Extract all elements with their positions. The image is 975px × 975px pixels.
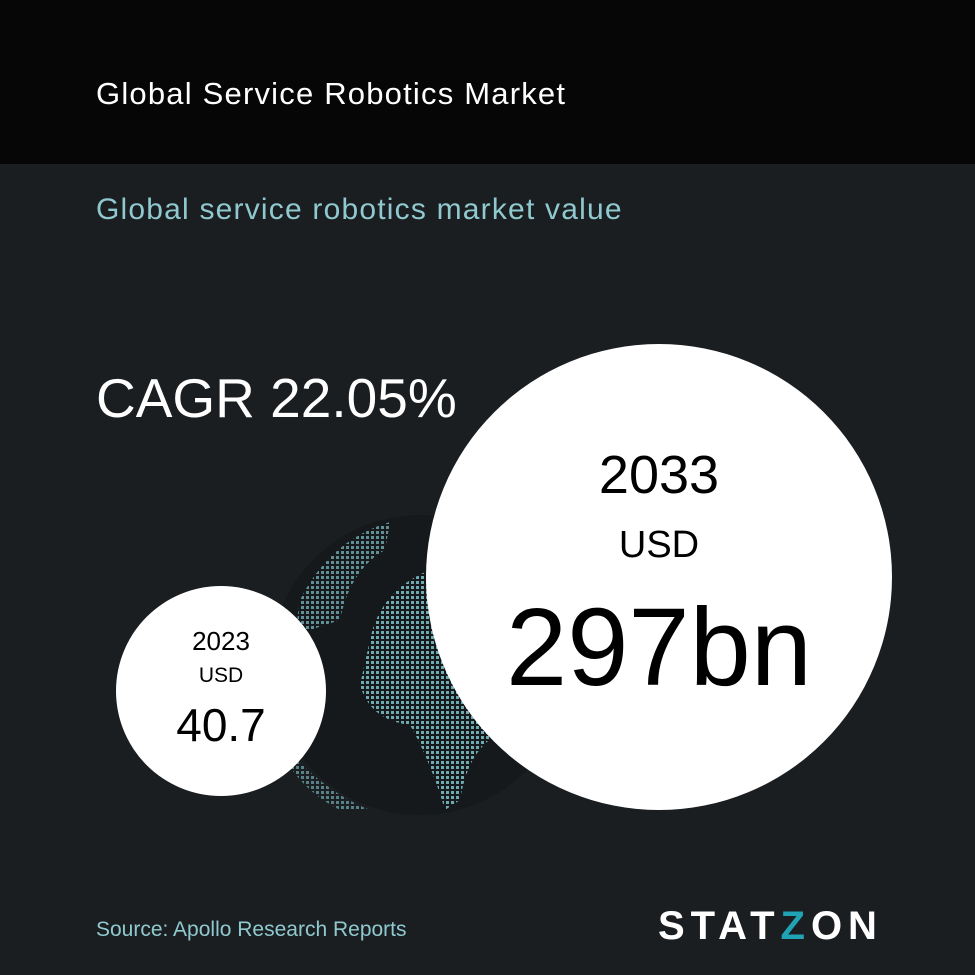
small circle: 2023: 2023 (192, 626, 250, 656)
logo: STATZON (658, 904, 883, 948)
small circle: 2023 (116, 586, 326, 796)
big circle: 2033 (426, 344, 892, 810)
globe illustration (292, 522, 492, 809)
big circle: 2033: 297bn (506, 586, 812, 709)
source: Source: Apollo Research Reports (96, 918, 406, 941)
big circle: 2033: USD (619, 524, 699, 566)
CAGR text: CAGR 22.05% (96, 367, 457, 429)
header bar (0, 0, 975, 164)
subtitle: Global service robotics market value (96, 193, 623, 226)
small circle: 2023: USD (199, 664, 243, 687)
big circle: 2033: 2033 (599, 445, 719, 505)
small circle: 2023: 40.7 (176, 699, 266, 751)
title: Global Service Robotics Market (96, 76, 566, 111)
